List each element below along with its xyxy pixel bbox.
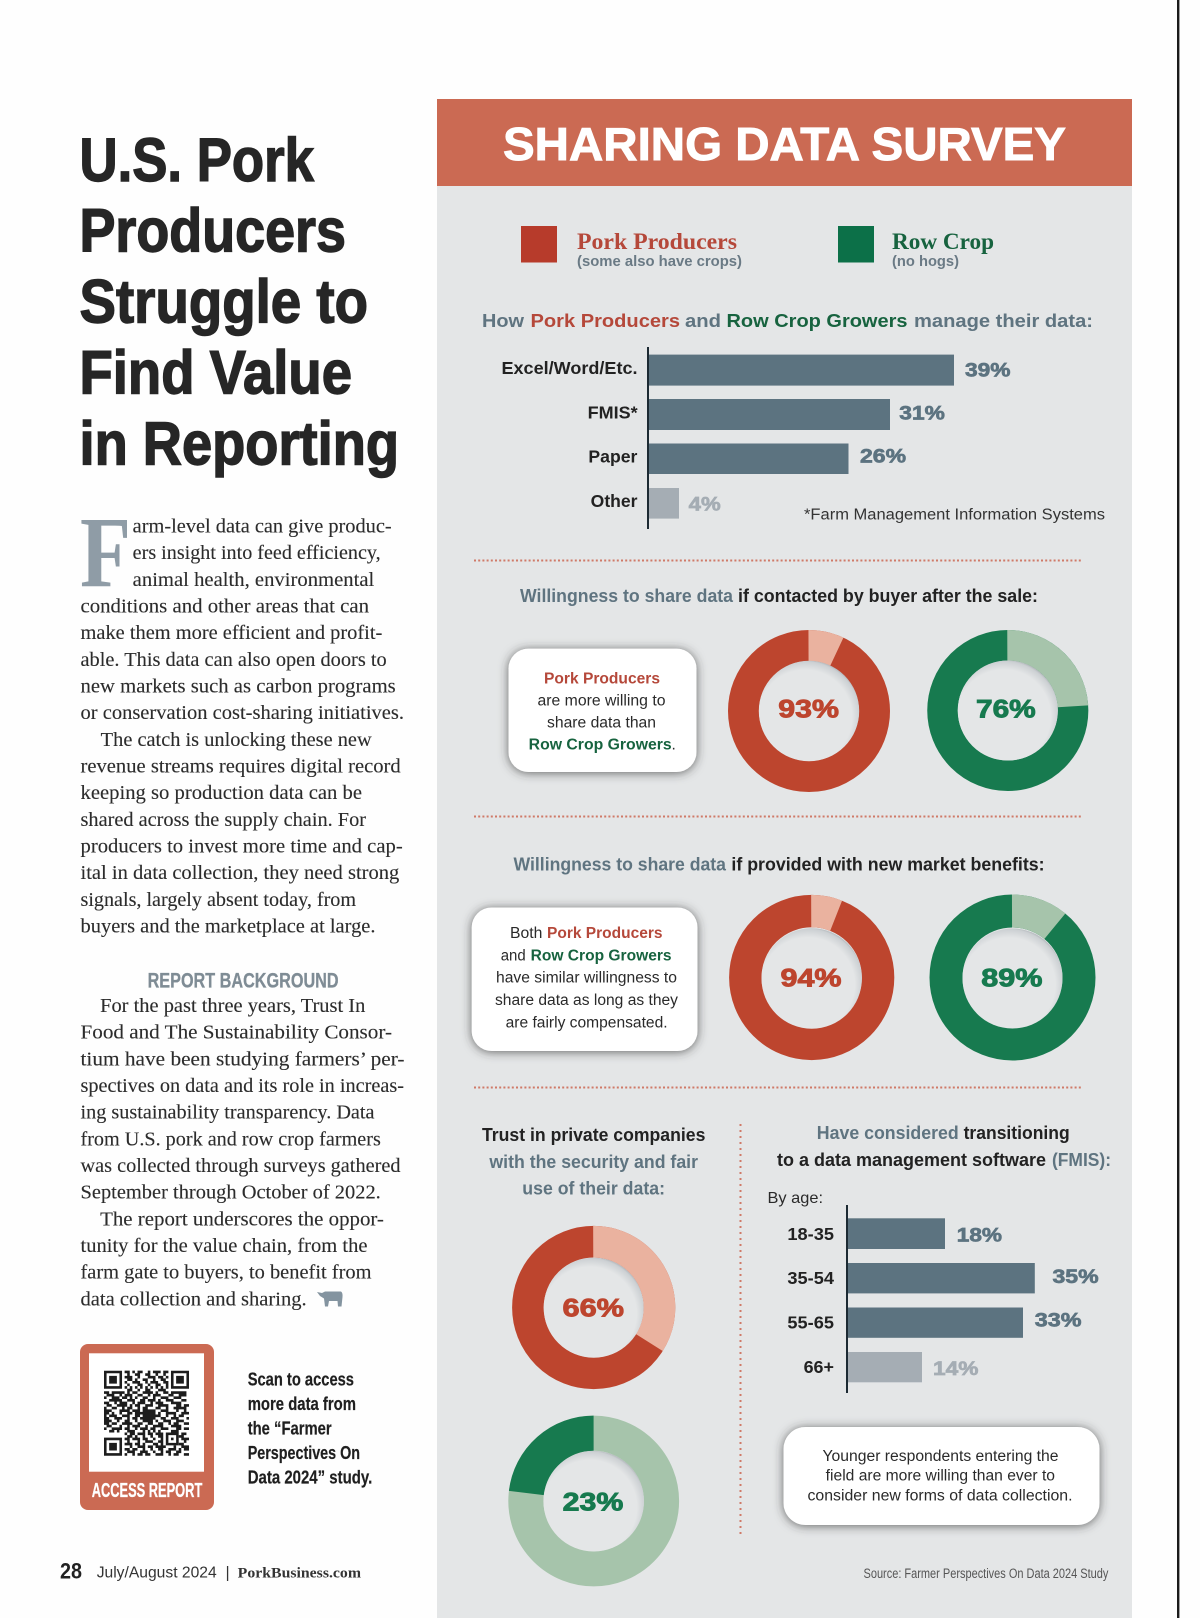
panel header banner [437,99,1132,186]
heading: trust in private companies [482,1124,705,1198]
intro body text: shared across the supply chain. For [80,809,366,831]
heading: transitioning to FMIS: transitioning [964,1122,1070,1143]
QR caption: Scan to access [248,1369,354,1389]
bar chart: data management tools: Excel/Word/Etc. [502,358,638,378]
QR caption: the “Farmer [248,1418,332,1438]
legend [521,226,994,270]
heading: trust in private companies: Trust in private companies [482,1124,705,1145]
QR card label: ACCESS REPORT [92,1479,203,1502]
donut: row crop 23%: 23% [563,1489,623,1517]
donut: row crop 89%: 89% [981,964,1042,992]
callout: similar willingness: Pork Producers [547,925,662,942]
page footer: July/August 2024 [97,1565,217,1582]
bar chart: FMIS by age: 33% [1035,1309,1082,1331]
donut: pork producers 93% [744,646,874,776]
drop cap: F [80,496,131,608]
heading: willingness with market benefits: Willingness to share data [514,853,727,874]
heading: willingness after sale [520,585,1038,606]
intro body text: buyers and the marketplace at large. [80,915,376,937]
callout: pork producers more willing: share data than [547,714,656,731]
report background body text: farm gate to buyers, to benefit from [80,1262,372,1284]
intro body text: able. This data can also open doors to [80,649,387,671]
article column [60,126,404,1583]
legend: row crop: (no hogs) [892,254,959,270]
callout: younger respondents [784,1427,1100,1525]
panel: sharing data survey [437,99,1132,1618]
donut: pork producers 94% [745,911,878,1044]
page footer: PorkBusiness.com [238,1566,362,1582]
article headline: in Reporting [80,410,399,478]
heading: transitioning to FMIS: (FMIS): [1052,1149,1111,1170]
page footer [60,1558,362,1583]
QR code [104,1371,189,1456]
donut: pork producers 94%: 94% [780,964,842,992]
by age label: By age: [768,1190,823,1207]
bar chart: data management tools: 4% [689,494,721,516]
QR caption: Perspectives On [248,1443,360,1463]
callout: pork producers more willing: are more willing to [538,692,666,709]
callout: similar willingness: have similar willingness to [496,970,677,987]
callout: younger respondents: field are more willing than ever to [826,1468,1055,1485]
donut: row crop 89% [946,911,1079,1044]
footnote: *Farm Management Information Systems [804,507,1105,524]
donut: row crop 76% [942,645,1073,776]
heading: transitioning to FMIS [777,1122,1111,1170]
subheading: report background: REPORT BACKGROUND [148,970,339,993]
article headline: U.S. Pork [80,126,314,194]
heading: willingness after sale: if contacted by buyer after the sale: [738,585,1038,606]
page footer: | [226,1565,230,1582]
intro body text: arm-level data can give produc- [133,515,392,537]
bar chart: FMIS by age: 18% [957,1224,1002,1246]
bar chart: FMIS by age: 14% [933,1358,978,1380]
report background body text: The report underscores the oppor- [100,1208,384,1230]
heading: how data is managed: Pork Producers [530,310,680,331]
report background body text: Food and The Sustainability Consor- [80,1022,392,1044]
callout: similar willingness: Row Crop Growers [531,948,672,965]
donut: row crop 23% [518,1425,669,1577]
article headline: Struggle to [80,268,368,336]
intro body text: or conservation cost-sharing initiatives. [80,702,404,724]
bar chart: FMIS by age: 55-65 [787,1313,834,1333]
article headline: Find Value [80,338,352,406]
QR caption [248,1369,372,1487]
icon: pig end mark [317,1292,343,1306]
donut: pork producers 66%: 66% [562,1294,624,1322]
legend: pork producers: (some also have crops) [577,254,742,270]
intro body text: The catch is unlocking these new [101,729,372,751]
callout: similar willingness: are fairly compensated. [506,1014,668,1032]
heading: willingness after sale: Willingness to share data [520,585,734,606]
report background body text: data collection and sharing. [80,1288,307,1310]
bar chart: data management tools: 31% [899,402,945,424]
QR caption: more data from [248,1394,356,1414]
heading: transitioning to FMIS: to a data management software [777,1149,1046,1170]
article headline [80,126,399,478]
intro body text: producers to invest more time and cap- [80,835,403,857]
donut: pork producers 66% [528,1242,660,1373]
intro body text: revenue streams requires digital record [80,755,401,777]
intro body text: keeping so production data can be [80,782,362,804]
report background body text: tium have been studying farmers’ per- [80,1048,404,1070]
intro body text: make them more efficient and profit- [80,622,382,644]
legend: row crop: Row Crop [892,229,994,254]
intro body text: signals, largely absent today, from [80,889,356,911]
heading: how data is managed: and [685,310,721,331]
report background body text [80,995,404,1310]
report background body text: tunity for the value chain, from the [80,1235,368,1257]
heading: how data is managed: How [482,310,525,331]
report background body text: was collected through surveys gathered [80,1155,400,1177]
page edge rule [1177,0,1179,1618]
bar chart: FMIS by age: 35-54 [787,1268,834,1288]
article headline: Producers [80,196,346,264]
report background body text: ing sustainability transparency. Data [80,1102,375,1124]
heading: transitioning to FMIS: Have considered [817,1122,959,1143]
bar chart: FMIS by age: 35% [1052,1266,1099,1288]
callout: similar willingness [472,908,698,1051]
QR code card [80,1344,214,1510]
report background body text: spectives on data and its role in increas- [80,1075,404,1097]
panel title: SHARING DATA SURVEY [503,118,1066,170]
page footer: 28 [60,1558,82,1583]
heading: willingness with market benefits [514,853,1045,874]
callout: pork producers more willing: Row Crop Growers [529,736,672,753]
QR caption: Data 2024” study. [248,1467,372,1487]
intro body text: ers insight into feed efficiency, [133,542,381,564]
heading: willingness with market benefits: if provided with new market benefits: [731,853,1045,874]
intro body text: new markets such as carbon programs [80,675,396,697]
callout: pork producers more willing [508,649,696,772]
report background body text: For the past three years, Trust In [100,995,365,1017]
heading: how data is managed [482,310,1093,331]
heading: how data is managed: Row Crop Growers [726,310,908,331]
callout: pork producers more willing: Pork Producers [544,670,660,687]
bar chart: data management tools: Paper [588,446,638,466]
intro body text: ital in data collection, they need strong [80,862,399,884]
heading: how data is managed: manage their data: [914,310,1093,331]
donut: pork producers 93%: 93% [778,696,839,724]
callout: similar willingness: share data as long as they [495,992,678,1009]
bar chart: FMIS by age: 66+ [804,1357,834,1377]
legend: row crop [838,226,994,270]
bar chart: data management tools [502,347,1010,529]
callout: younger respondents: Younger respondents entering the [822,1448,1058,1465]
intro body text: animal health, environmental [133,569,375,591]
callout: similar willingness: and [501,948,526,965]
bar chart: data management tools: 39% [965,360,1010,382]
callout: pork producers more willing: . [672,736,676,753]
report background body text: September through October of 2022. [80,1182,381,1204]
intro body text: conditions and other areas that can [80,595,369,617]
bar chart: data management tools: FMIS* [588,402,638,422]
report background body text: from U.S. pork and row crop farmers [80,1128,381,1150]
bar chart: data management tools: 26% [860,446,906,468]
legend: pork producers [521,226,742,270]
intro body text [80,516,404,938]
callout: similar willingness: Both [510,925,542,942]
bar chart: FMIS by age [787,1205,1099,1393]
callout: younger respondents: consider new forms of data collection. [808,1488,1072,1505]
donut: row crop 76%: 76% [976,696,1036,724]
legend: pork producers: Pork Producers [577,229,737,254]
heading: trust in private companies: use of their data: [522,1177,665,1198]
heading: trust in private companies: with the security and fair [488,1151,698,1172]
source note: Source: Farmer Perspectives On Data 2024 Study [864,1566,1109,1581]
bar chart: FMIS by age: 18-35 [787,1224,834,1244]
bar chart: data management tools: Other [591,491,638,511]
